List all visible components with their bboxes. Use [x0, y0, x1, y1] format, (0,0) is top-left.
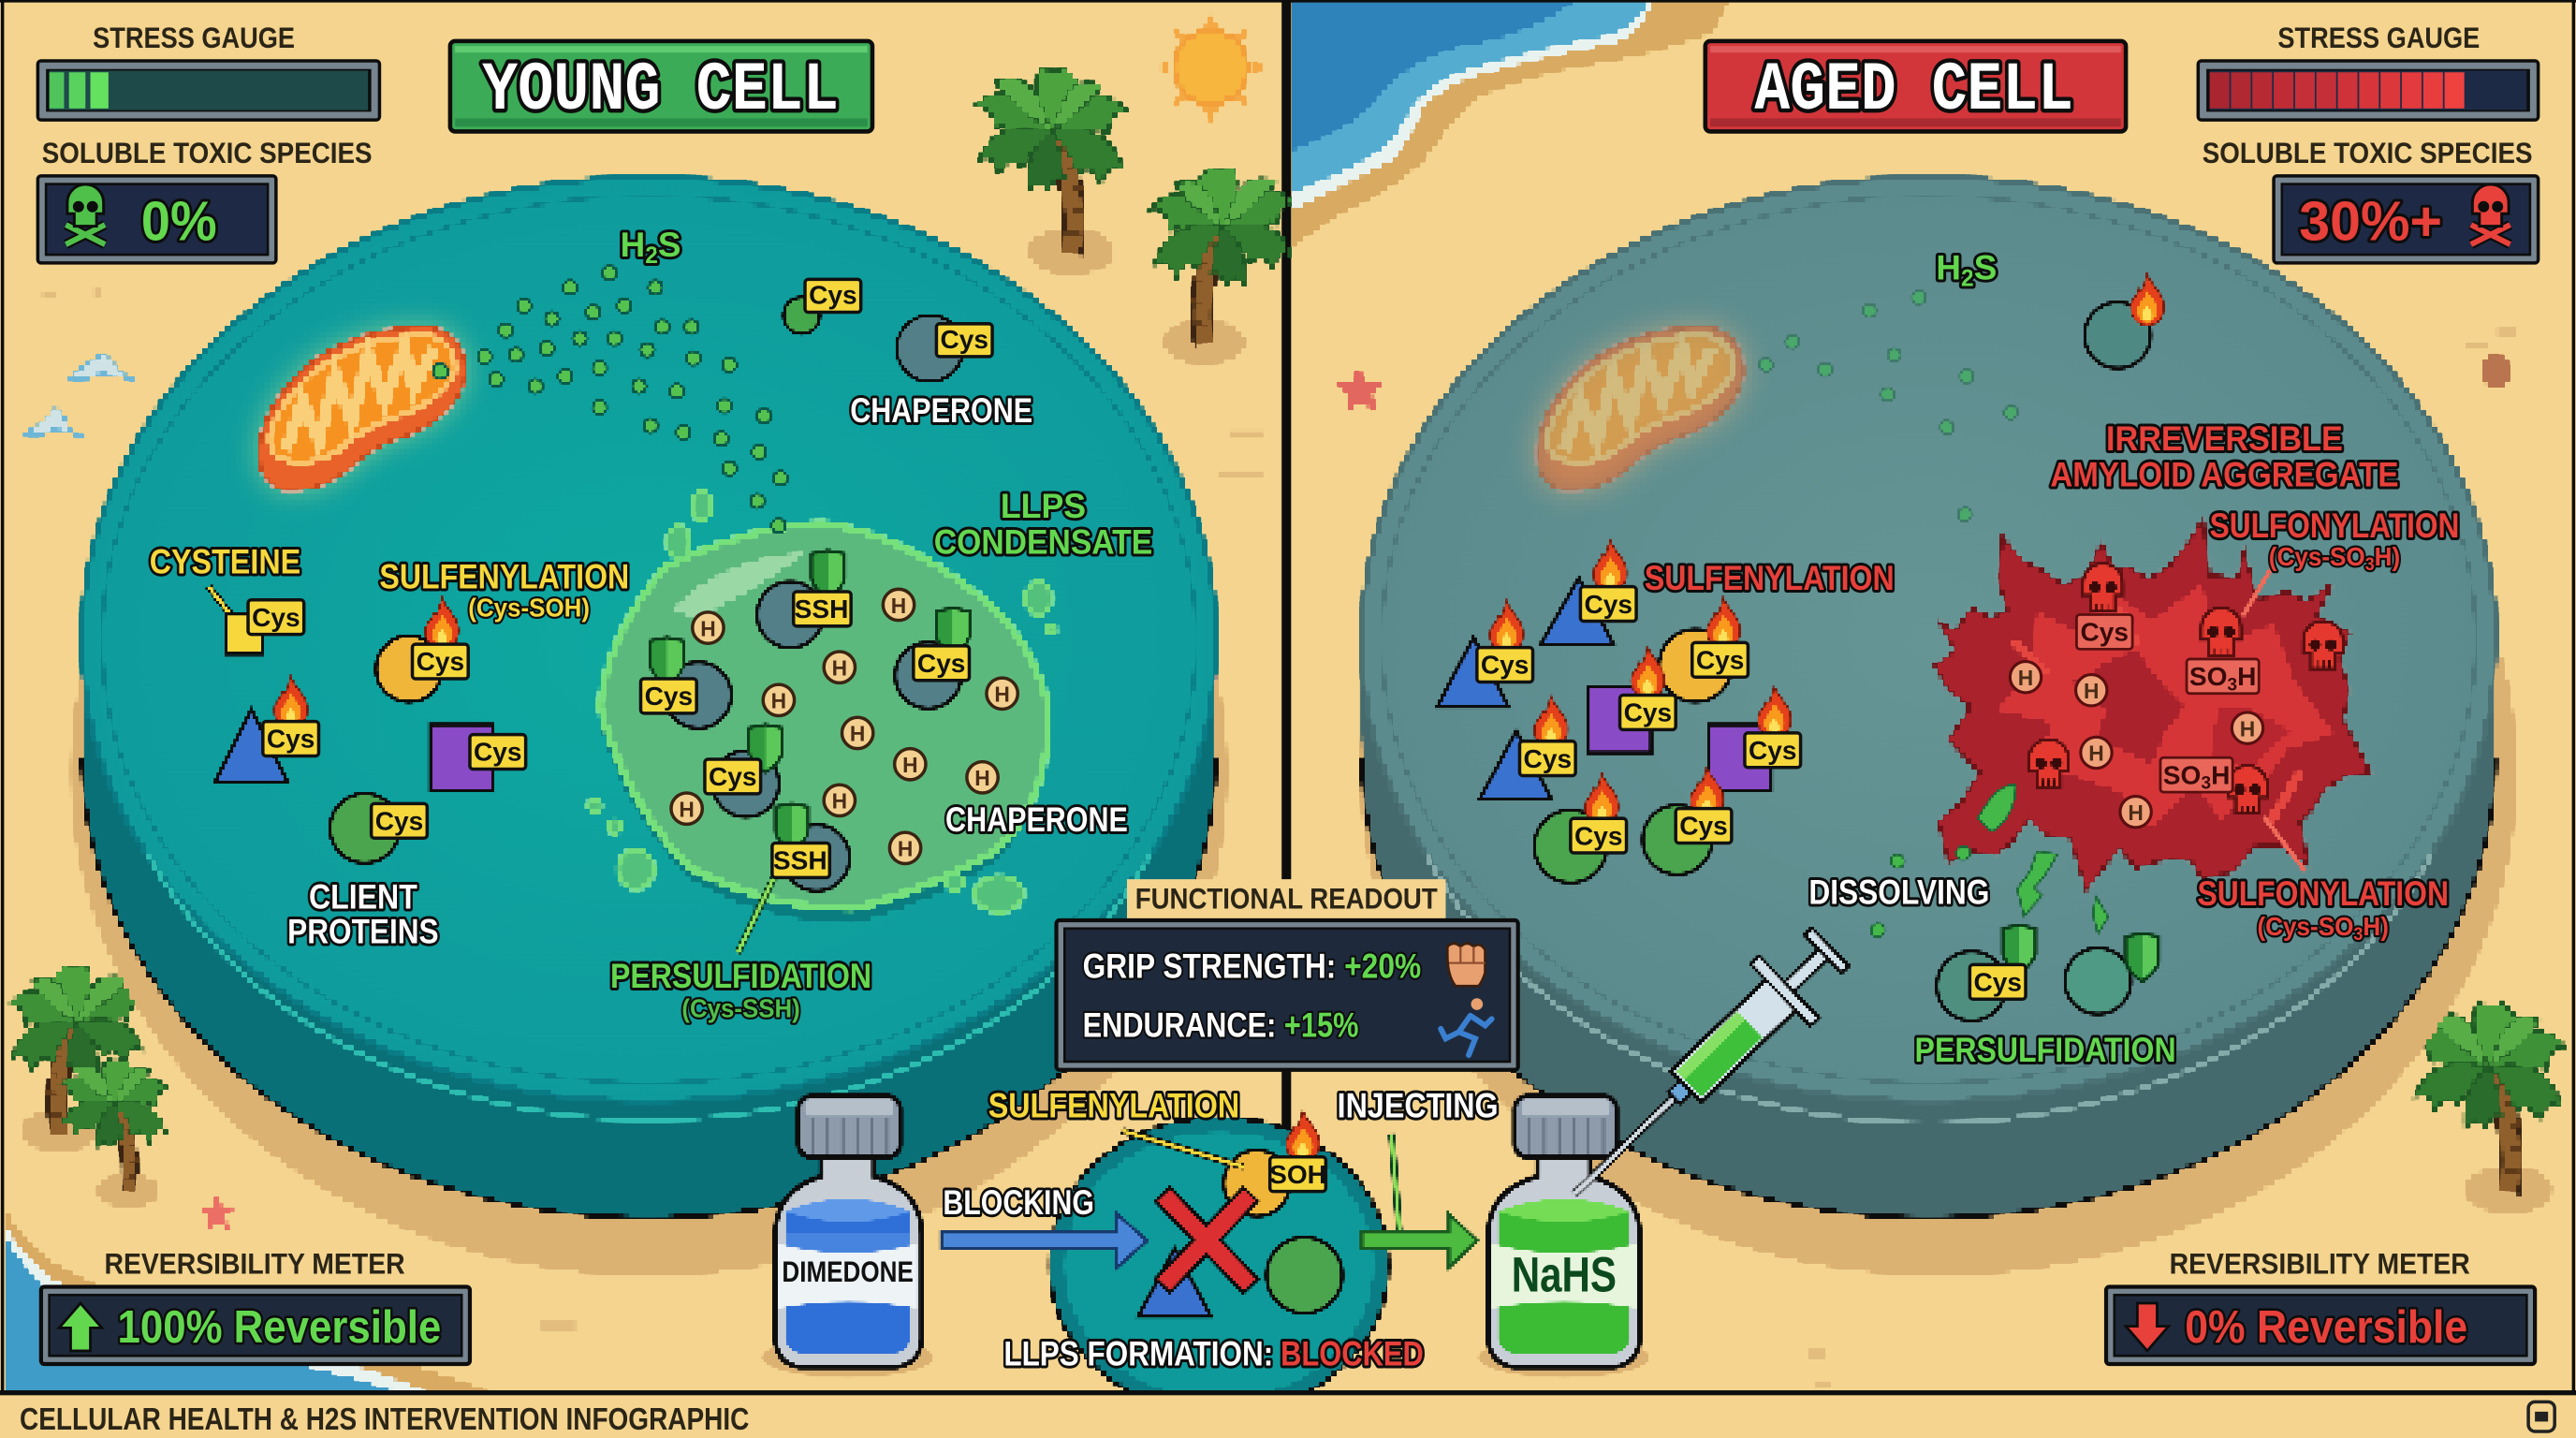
starfish right: [1338, 368, 1383, 411]
right stress gauge label: STRESS GAUGE: [2277, 21, 2480, 54]
cys tags client proteins young: Cys: [417, 647, 464, 676]
footer bar: CELLULAR HEALTH & H2S INTERVENTION INFOGRAPHIC: [20, 1402, 749, 1437]
H2S dots aged: [1760, 291, 2017, 521]
aggregate tags: H: [2237, 662, 2256, 691]
cys tags client proteins aged: Cys: [1749, 736, 1797, 765]
hydrogen badges young: H: [832, 655, 847, 680]
H2S label young: 2: [645, 243, 658, 269]
cys tags client proteins aged: Cys: [1696, 645, 1744, 674]
hydrogen badges young: H: [902, 753, 918, 777]
condensate tags: Cys: [709, 762, 757, 791]
cys tags client proteins aged: Cys: [1574, 821, 1622, 850]
cys tags client proteins aged: Cys: [1524, 744, 1572, 773]
right reversibility meter: 0% Reversible: [2185, 1302, 2467, 1353]
hydrogen badges aged: [2010, 662, 2263, 828]
sulfenylation label young: (Cys-SOH): [468, 593, 590, 622]
amyloid skulls: [2029, 564, 2343, 814]
irreversible amyloid aggregate label: IRREVERSIBLE: [2106, 419, 2343, 458]
condensate tags: SSH: [795, 594, 848, 624]
left stress gauge: [37, 61, 379, 120]
irreversible amyloid aggregate label: AMYLOID AGGREGATE: [2050, 456, 2398, 494]
irreversible amyloid aggregate label: [2050, 419, 2398, 494]
young cell disc: [70, 178, 1227, 1275]
persulfidation label young: PERSULFIDATION: [610, 957, 871, 995]
cys tags client proteins young: Cys: [252, 603, 300, 632]
condensate tags: [640, 592, 970, 877]
cys tags client proteins aged: Cys: [1624, 698, 1672, 727]
footer bar: [0, 1390, 2576, 1438]
injecting label: INJECTING: [1338, 1087, 1499, 1125]
right stress gauge: [2198, 61, 2539, 120]
hydrogen badges aged: H: [2128, 800, 2144, 825]
hydrogen badges young: H: [850, 722, 865, 746]
sulfenylation label young: SULFENYLATION: [379, 557, 629, 595]
hydrogen badges aged: H: [2240, 716, 2255, 741]
cys tags client proteins aged: Cys: [1481, 651, 1529, 680]
sulfonylation pointers: [2243, 567, 2305, 871]
H2S label aged: 2: [1961, 266, 1974, 291]
palm tree bottom right: [2411, 1004, 2566, 1213]
hydrogen badges young: H: [994, 682, 1010, 707]
sand specks: [43, 289, 2517, 1387]
chaperone label top: CHAPERONE: [850, 391, 1032, 430]
icon: fist: [1447, 944, 1486, 986]
aged flame over lone protein: [2085, 274, 2163, 368]
sun: [1157, 15, 1265, 122]
sulfenylation label mini: SULFENYLATION: [988, 1087, 1239, 1125]
hydrogen badges young: H: [974, 766, 990, 790]
ocean water top: [1292, 0, 1728, 246]
condensate tags: Cys: [917, 649, 965, 678]
dissolving droplets: [1871, 785, 2108, 937]
dissolving label: DISSOLVING: [1808, 873, 1989, 911]
wave doodles: [26, 355, 133, 437]
dimedone bottle: [762, 1096, 933, 1377]
aggregate tags: SO: [2163, 760, 2201, 789]
left reversibility meter: 100% Reversible: [117, 1302, 441, 1353]
sulfonylation label bottom: 3: [2353, 925, 2364, 945]
aged cell title: AGED CELL: [1754, 52, 2073, 130]
palm tree top 1: [976, 69, 1127, 274]
hydrogen badges young: H: [679, 797, 695, 821]
amyloid aggregate: [1936, 520, 2371, 889]
cys tags client proteins aged: [1477, 587, 2026, 999]
LLPS condensate label: [934, 487, 1152, 562]
cys tags client proteins aged: Cys: [1973, 968, 2022, 997]
cys tag small client: Cys: [809, 281, 857, 310]
cys tags client proteins young: Cys: [375, 806, 423, 835]
client proteins label: CLIENT: [309, 878, 417, 917]
client proteins label: PROTEINS: [287, 913, 439, 951]
H2S label aged: H: [1936, 248, 1961, 286]
mini cell proteins: [1122, 1111, 1342, 1316]
sulfenylation label young: [379, 557, 629, 622]
left soluble toxic label: SOLUBLE TOXIC SPECIES: [42, 136, 373, 169]
sulfonylation label bottom: H): [2363, 912, 2389, 941]
mitochondrion aged: [1537, 327, 1743, 490]
aggregate tags: H: [2211, 760, 2230, 789]
left reversibility meter label: REVERSIBILITY METER: [104, 1246, 405, 1280]
blocking arrow: [942, 1214, 1147, 1267]
detailed sprite layer: [209, 266, 2343, 1377]
blocking label: BLOCKING: [943, 1183, 1094, 1222]
sulfonylation label top: (Cys-SO: [2269, 542, 2373, 571]
cysteine label: CYSTEINE: [150, 543, 300, 581]
client proteins aged: [1438, 541, 1791, 883]
seashell: [2481, 355, 2510, 388]
functional readout panel: ENDURANCE: +15%: [1083, 1006, 1358, 1045]
LLPS condensate label: LLPS: [1001, 487, 1086, 525]
right soluble toxic label: SOLUBLE TOXIC SPECIES: [2203, 136, 2532, 169]
persulfidation pointer: [738, 877, 774, 953]
dimedone bottle label: DIMEDONE: [782, 1255, 914, 1288]
SOH tag: SOH: [1269, 1160, 1326, 1189]
chaperones in condensate: [666, 581, 961, 890]
divider: [1284, 0, 1288, 1394]
cys tag chaperone: Cys: [940, 325, 988, 354]
syringe: [1544, 917, 1860, 1225]
cys tags client proteins aged: Cys: [1679, 812, 1728, 841]
right soluble toxic readout: 30%+: [2299, 189, 2442, 252]
ocean water bottom: [5, 1208, 493, 1394]
sulfonylation label bottom: [2197, 874, 2449, 945]
sulfonylation label top: [2210, 506, 2459, 575]
palm tree top 2: [1151, 169, 1295, 364]
H2S label young: S: [658, 226, 681, 264]
client proteins young: [215, 598, 493, 863]
rescued proteins aged: [1937, 925, 2159, 1020]
starfish left: [200, 1196, 235, 1229]
hydrogen badges aged: H: [2018, 666, 2033, 690]
left reversibility meter: [41, 1286, 470, 1364]
mini cell: [1050, 1118, 1388, 1414]
hydrogen badges aged: H: [2088, 741, 2104, 766]
client proteins label: [287, 878, 439, 951]
cysteine square and pointer: [209, 587, 263, 654]
right reversibility meter label: REVERSIBILITY METER: [2170, 1246, 2470, 1280]
cys tags client proteins aged: Cys: [1584, 590, 1632, 619]
condensate tags: Cys: [645, 682, 693, 711]
functional readout panel: GRIP STRENGTH: +20%: [1083, 946, 1421, 985]
sulfenylation label aged: SULFENYLATION: [1645, 559, 1895, 597]
persulfidation label aged: PERSULFIDATION: [1915, 1031, 2176, 1069]
LLPS blocked label: BLOCKED: [1281, 1335, 1424, 1373]
aggregate tags: 3: [2201, 774, 2211, 794]
functional readout panel: [1057, 920, 1518, 1070]
persulfidation shields young: [651, 550, 970, 851]
sulfonylation label top: SULFONYLATION: [2210, 506, 2459, 545]
chaperone label lower: CHAPERONE: [945, 800, 1128, 839]
sulfonylation label bottom: (Cys-SO: [2258, 912, 2361, 941]
LLPS condensate label: CONDENSATE: [934, 523, 1152, 562]
NaHS bottle: [1479, 1096, 1649, 1377]
cys tags client proteins young: Cys: [267, 725, 315, 754]
aggregate tags: [2076, 615, 2259, 794]
young cell title: YOUNG CELL: [482, 52, 839, 130]
functional readout label: FUNCTIONAL READOUT: [1135, 882, 1438, 916]
left soluble toxic readout: [37, 176, 276, 263]
hydrogen badges young: [671, 589, 1017, 863]
aggregate tags: Cys: [2081, 618, 2129, 647]
hydrogen badges young: H: [771, 689, 786, 713]
condensate tags: SSH: [773, 846, 827, 875]
left stress gauge label: STRESS GAUGE: [93, 21, 295, 54]
sulfonylation label bottom: SULFONYLATION: [2197, 874, 2449, 913]
sulfonylation label top: H): [2375, 542, 2400, 571]
red cross: [1170, 1201, 1244, 1279]
NaHS bottle label: NaHS: [1512, 1248, 1617, 1303]
hydrogen badges young: H: [832, 789, 847, 814]
persulfidation label young: [610, 957, 871, 1023]
right soluble toxic readout: [2274, 176, 2539, 263]
H2S label young: H: [621, 226, 645, 264]
H2S dots young: [432, 266, 787, 533]
small client and chaperone young: [783, 298, 962, 381]
sulfonylation label top: 3: [2365, 555, 2375, 575]
hydrogen badges young: H: [700, 616, 716, 640]
cys tags client proteins young: [248, 600, 526, 838]
LLPS condensate: [588, 492, 1057, 924]
persulfidation label young: (Cys-SSH): [681, 994, 800, 1023]
aggregate tags: SO: [2189, 662, 2227, 691]
icon: runner: [1441, 998, 1492, 1055]
aged cell disc: [1360, 178, 2517, 1275]
hydrogen badges young: H: [891, 594, 906, 618]
hydrogen badges aged: H: [2084, 679, 2099, 703]
injecting arrow: [1362, 1134, 1477, 1267]
palm tree bottom left 2: [60, 1060, 168, 1208]
right reversibility meter: [2106, 1286, 2535, 1364]
left soluble toxic readout: 0%: [141, 189, 217, 252]
cys tags client proteins young: Cys: [474, 738, 522, 767]
H2S label aged: S: [1974, 248, 1997, 286]
hydrogen badges young: H: [898, 837, 913, 861]
LLPS blocked label: LLPS FORMATION:: [1003, 1335, 1273, 1373]
palm tree bottom left 1: [8, 967, 145, 1152]
aggregate tags: 3: [2227, 675, 2237, 695]
mitochondrion young: [259, 327, 465, 490]
